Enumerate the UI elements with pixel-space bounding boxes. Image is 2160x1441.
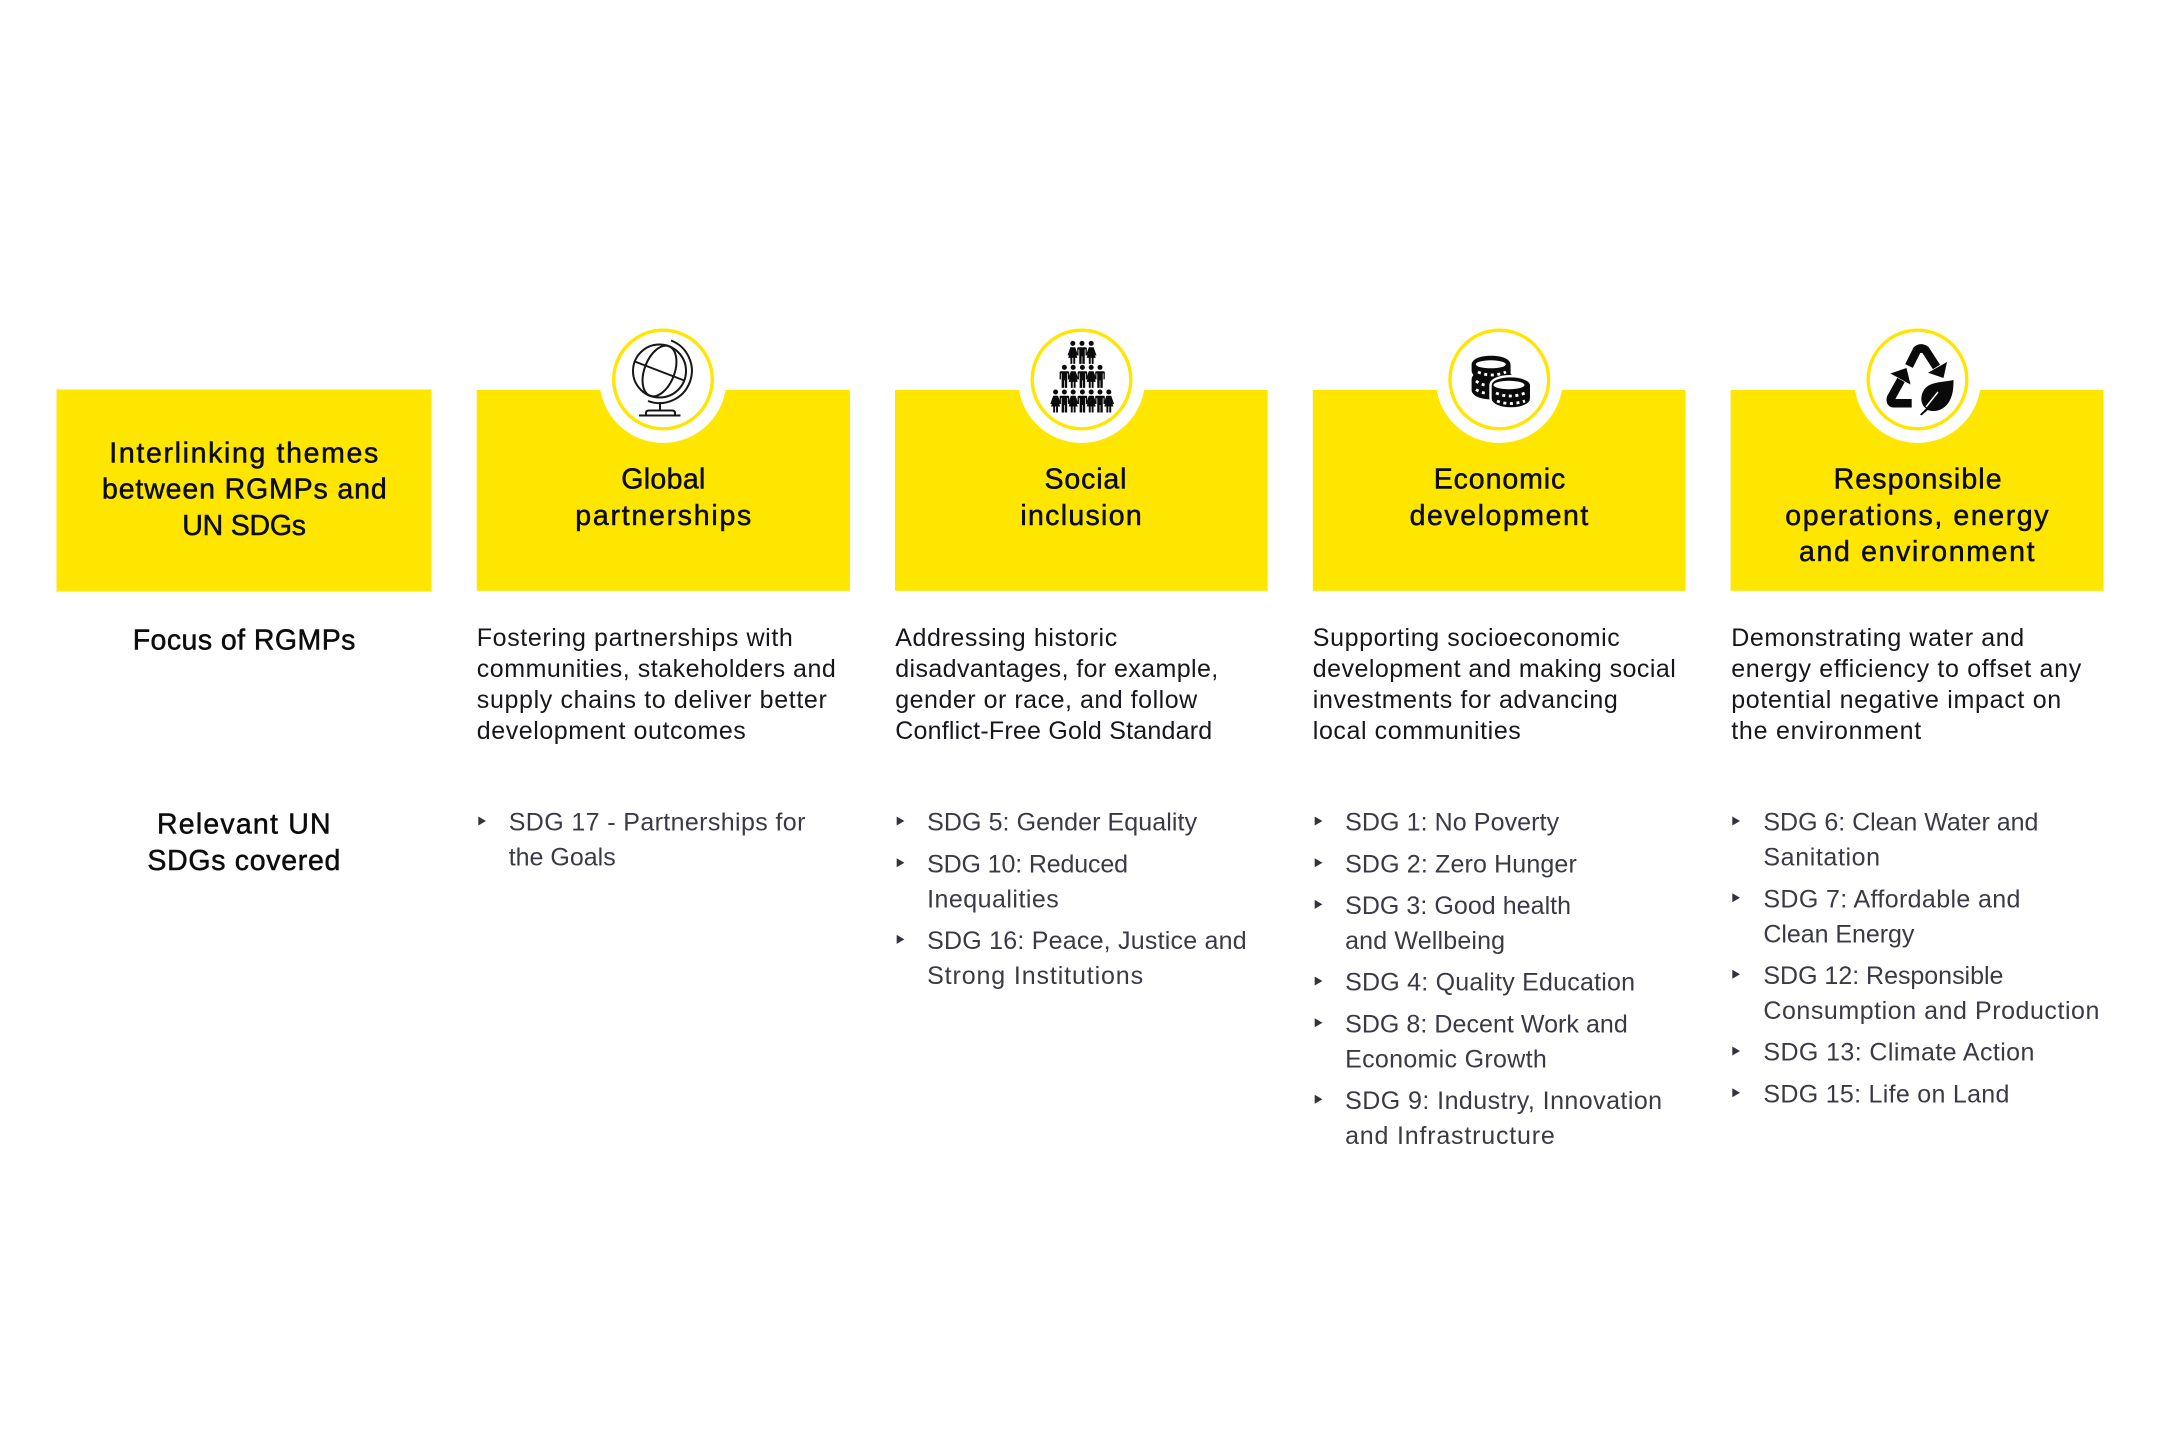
header box (1313, 390, 1686, 591)
list item: SDG 10: Inequalities (927, 885, 1059, 913)
description: investments for advancing (1313, 686, 1618, 714)
list item: SDG 8 (1315, 1010, 1628, 1073)
description: local communities (1313, 717, 1521, 745)
icon: coin stacks (1436, 316, 1563, 443)
heading: Responsible (1834, 463, 2002, 495)
description: development and making social (1313, 655, 1676, 683)
SDG list (478, 809, 805, 872)
list item: SDG 6: Sanitation (1763, 844, 1880, 872)
description: Addressing historic (895, 624, 1117, 652)
heading (1410, 463, 1588, 532)
description: supply chains to deliver better (477, 686, 827, 714)
heading: partnerships (575, 500, 751, 532)
header box: interlinking themes: Interlinking themes (109, 437, 378, 469)
list item: SDG 12: SDG 12: Responsible (1763, 962, 2003, 990)
row label: focus of RGMPs: Focus of RGMPs (133, 624, 355, 656)
list item: SDG 7 (1732, 885, 2020, 949)
panel: responsible operations, energy and environment (1731, 316, 2104, 1108)
list item: SDG 10 (897, 850, 1128, 913)
list item: SDG 16: Strong Institutions (927, 962, 1143, 990)
list item: SDG 7: SDG 7: Affordable and (1763, 885, 2020, 913)
list item: SDG 3: SDG 3: Good health (1345, 892, 1571, 920)
list item: SDG 6: SDG 6: Clean Water and (1763, 809, 2038, 837)
description: communities, stakeholders and (477, 655, 836, 683)
list item: SDG 15: SDG 15: Life on Land (1763, 1080, 2009, 1108)
header box: interlinking themes: between RGMPs and (102, 474, 387, 506)
list item: SDG 16: SDG 16: Peace, Justice and (927, 927, 1247, 955)
icon: recycling arrows and leaf (1854, 316, 1981, 443)
list item: SDG 3: and Wellbeing (1345, 927, 1505, 955)
list item: SDG 2: SDG 2: Zero Hunger (1345, 850, 1577, 878)
description (895, 624, 1218, 745)
list item: SDG 1: SDG 1: No Poverty (1345, 809, 1560, 837)
icon: people pyramid (1018, 316, 1145, 443)
description: development outcomes (477, 717, 746, 745)
list item: SDG 12 (1732, 962, 2099, 1025)
list item: SDG 9: SDG 9: Industry, Innovation (1345, 1087, 1662, 1115)
heading (1785, 463, 2049, 568)
list item: SDG 3 (1315, 892, 1571, 955)
description: Conflict-Free Gold Standard (895, 717, 1212, 745)
list item: SDG 4: SDG 4: Quality Education (1345, 969, 1635, 997)
list item: SDG 8: Economic Growth (1345, 1045, 1547, 1073)
description: Fostering partnerships with (477, 624, 793, 652)
heading: inclusion (1020, 500, 1142, 532)
heading: Economic (1434, 463, 1565, 495)
heading: Social (1044, 463, 1126, 495)
description: Supporting socioeconomic (1313, 624, 1620, 652)
heading (1020, 463, 1142, 532)
SDG list (1732, 809, 2099, 1108)
panel: social inclusion (895, 316, 1268, 990)
list item: SDG 8: SDG 8: Decent Work and (1345, 1010, 1628, 1038)
SDG list: SDG 17 - Partnerships for (509, 809, 805, 837)
description: Demonstrating water and (1731, 624, 2024, 652)
description (1313, 624, 1676, 745)
heading: Global (621, 463, 705, 495)
SDG list (897, 809, 1247, 990)
list item: SDG 6 (1732, 809, 2038, 872)
icon: globe (600, 316, 726, 443)
list item: SDG 10: SDG 10: Reduced (927, 850, 1128, 878)
SDG list (1315, 809, 1662, 1150)
heading: operations, energy (1785, 500, 2049, 532)
heading: development (1410, 500, 1588, 532)
list item: SDG 9 (1315, 1087, 1662, 1150)
description: potential negative impact on (1731, 686, 2061, 714)
list item: SDG 9: and Infrastructure (1345, 1122, 1555, 1150)
heading (575, 463, 751, 532)
description: energy efficiency to offset any (1731, 655, 2082, 683)
description (1731, 624, 2082, 745)
list item: SDG 12: Consumption and Production (1763, 997, 2099, 1025)
panel: global partnerships (477, 316, 850, 872)
list item: SDG 16 (897, 927, 1247, 990)
description: the environment (1731, 717, 1921, 745)
description (477, 624, 836, 745)
header box (477, 390, 850, 591)
description: disadvantages, for example, (895, 655, 1218, 683)
heading: and environment (1799, 536, 2035, 568)
panel: economic development (1313, 316, 1686, 1150)
row label: relevant UN SDGs covered: SDGs covered (147, 845, 340, 877)
description: gender or race, and follow (895, 686, 1198, 714)
SDG list: the Goals (509, 844, 616, 872)
row labels column (56, 390, 432, 877)
header box: interlinking themes: UN SDGs (182, 510, 306, 542)
row label: relevant UN SDGs covered: Relevant UN (157, 808, 331, 840)
list item: SDG 7: Clean Energy (1763, 921, 1915, 949)
header box: interlinking themes (56, 390, 432, 592)
list item: SDG 13: SDG 13: Climate Action (1763, 1039, 2034, 1067)
header box (1731, 390, 2104, 591)
row label: relevant UN SDGs covered (147, 808, 340, 877)
list item: SDG 5: SDG 5: Gender Equality (927, 809, 1198, 837)
header box (895, 390, 1268, 591)
